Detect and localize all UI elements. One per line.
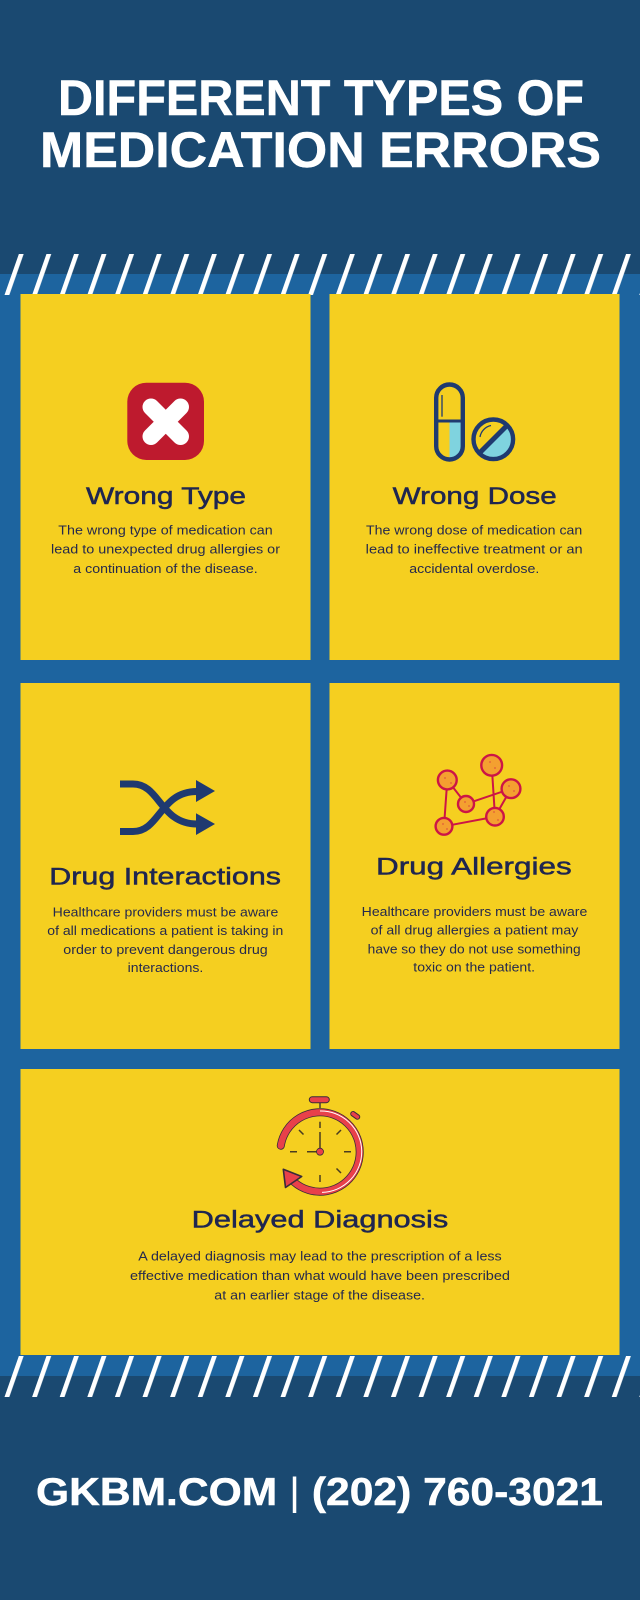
text: drug interactions description [47, 905, 283, 975]
text: wrong type description: a continuation of the disease. [73, 561, 258, 576]
heading: wrong type: Wrong Type [86, 483, 246, 510]
title: MEDICATION ERRORS [40, 122, 601, 178]
heading: delayed diagnosis: Delayed Diagnosis [192, 1207, 448, 1234]
text: drug allergies description: toxic on the patient. [413, 959, 535, 974]
icon: stopwatch [281, 1097, 362, 1192]
text: drug allergies description: have so they do not use something [368, 941, 581, 956]
text: drug interactions description: order to prevent dangerous drug [63, 942, 268, 957]
title [40, 70, 601, 178]
panel: wrong type [20, 294, 310, 660]
panel: wrong dose [330, 294, 620, 660]
heading: wrong dose: Wrong Dose [393, 483, 557, 510]
text: delayed diagnosis description: at an earlier stage of the disease. [214, 1287, 425, 1302]
text: wrong type description: The wrong type of medication can [58, 522, 273, 537]
text: delayed diagnosis description [130, 1249, 510, 1302]
text: wrong dose description [366, 522, 583, 576]
icon: capsule and pill [436, 384, 513, 460]
footer contact line: GKBM.COM | (202) 760-3021 [36, 1471, 603, 1514]
text: drug allergies description [362, 904, 587, 974]
text: wrong dose description: accidental overdose. [409, 561, 539, 576]
panel: drug interactions [20, 683, 310, 1049]
icon: molecule network [436, 755, 520, 835]
text: drug allergies description: Healthcare providers must be aware [362, 904, 587, 919]
panel: drug allergies [330, 683, 620, 1049]
text: wrong dose description: lead to ineffective treatment or an [366, 542, 583, 557]
text: wrong dose description: The wrong dose of medication can [366, 522, 582, 537]
text: delayed diagnosis description: effective medication than what would have been prescribed [130, 1268, 510, 1283]
panel: delayed diagnosis [20, 1069, 620, 1355]
text: wrong type description [51, 522, 281, 576]
text: wrong type description: lead to unexpected drug allergies or [51, 542, 281, 557]
text: drug interactions description: interactions. [128, 960, 203, 975]
title: DIFFERENT TYPES OF [58, 70, 584, 126]
text: drug interactions description: of all medications a patient is taking in [47, 923, 283, 938]
heading: drug allergies: Drug Allergies [376, 853, 572, 880]
icon: shuffle arrows [120, 780, 215, 835]
icon: red cross [127, 383, 204, 460]
text: drug interactions description: Healthcare providers must be aware [53, 905, 278, 920]
heading: drug interactions: Drug Interactions [49, 863, 281, 890]
text: drug allergies description: of all drug allergies a patient may [371, 923, 579, 938]
text: delayed diagnosis description: A delayed diagnosis may lead to the prescription of a less [138, 1249, 502, 1264]
